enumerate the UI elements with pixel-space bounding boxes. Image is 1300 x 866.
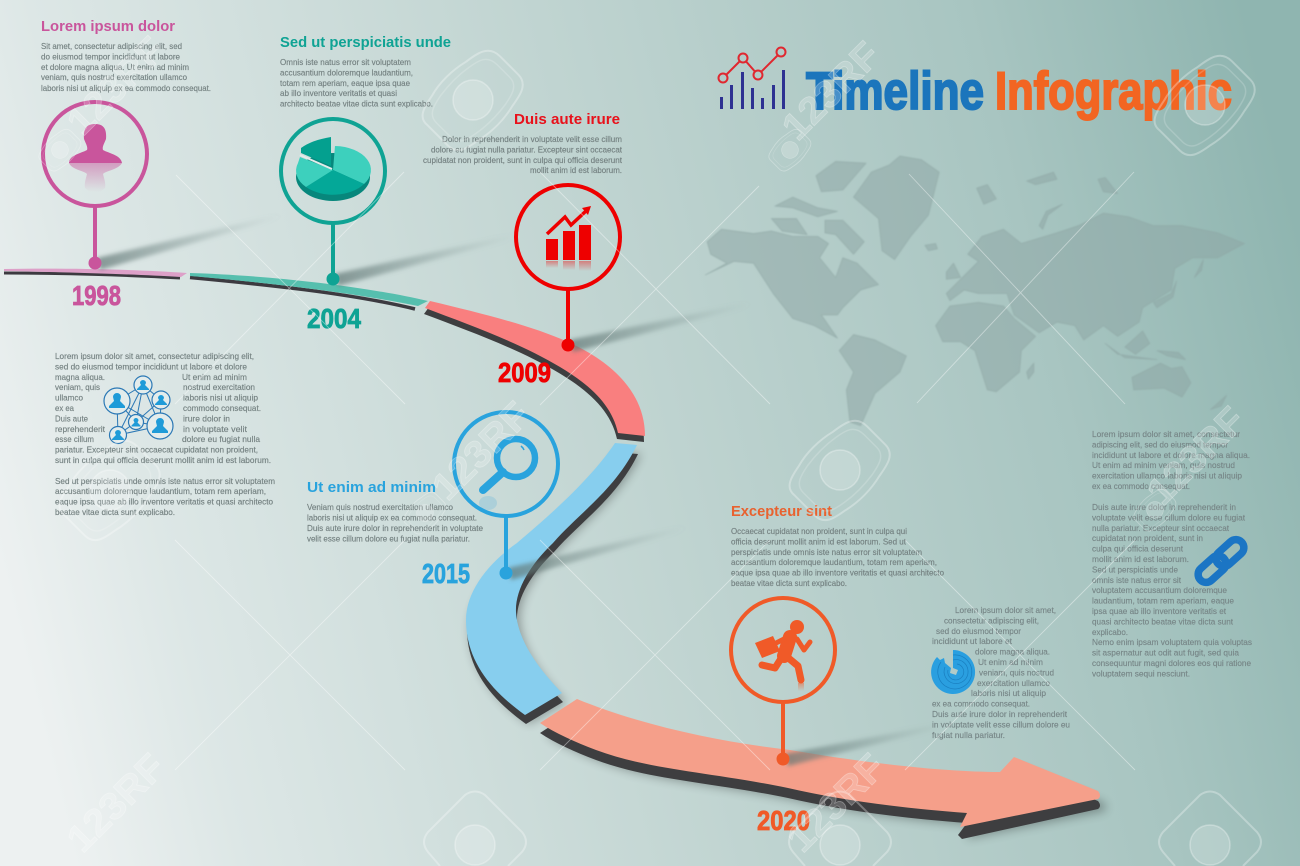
text block: right column with link icon: ex ea commodo consequat. (1092, 481, 1190, 491)
text block: wrapped around disc icon: exercitation ullamco (977, 678, 1050, 688)
icon: pie chart (296, 137, 371, 201)
title icon: line and bar chart (718, 48, 786, 109)
text block: Lorem ipsum dolor (41, 18, 211, 93)
text block: Excepteur sint: Excepteur sint (731, 503, 832, 520)
text block: Duis aute irure: Duis aute irure (514, 111, 620, 128)
watermark text: 123RF (779, 746, 894, 861)
text block: left column with network icon (55, 351, 275, 517)
text block: Ut enim ad minim (307, 479, 483, 544)
watermark text: 123RF (59, 746, 174, 861)
pin shadows (97, 214, 950, 766)
road: segment 2004 (190, 273, 428, 309)
text block: left column with network icon: esse cillum (55, 434, 94, 444)
text block: right column with link icon: Duis aute irure dolor in reprehenderit in (1092, 502, 1236, 512)
text block: right column with link icon: quasi architecto beatae vitae dicta sunt (1092, 616, 1234, 626)
text block: left column with network icon: accusantium doloremque laudantium, totam rem aperiam, (55, 486, 266, 496)
road: segment 1998 (4, 269, 187, 278)
milestone 1998 pin (43, 102, 147, 270)
text block: Lorem ipsum dolor: Sit amet, consectetur adipiscing elit, sed (41, 41, 182, 51)
year: 1998: 1998 (72, 280, 121, 311)
text block: right column with link icon: Nemo enim ipsam voluptatem quia voluptas (1092, 637, 1252, 647)
text block: left column with network icon: laboris nisi ut aliquip (183, 393, 258, 403)
text block: left column with network icon: in voluptate velit (183, 424, 248, 434)
text block: left column with network icon: Lorem ipsum dolor sit amet, consectetur adipiscing elit, (55, 351, 254, 361)
text block: wrapped around disc icon: fugiat nulla pariatur. (932, 730, 1005, 740)
text block: Ut enim ad minim: velit esse cillum dolore eu fugiat nulla pariatur. (307, 534, 470, 544)
text block: left column with network icon: Duis aute (55, 413, 88, 423)
icon: people network (104, 376, 173, 444)
text block: right column with link icon: ipsa quae ab illo inventore veritatis et (1092, 606, 1227, 616)
text block: Sed ut perspiciatis unde (280, 34, 451, 108)
text block: Excepteur sint: perspiciatis unde omnis iste natus error sit voluptatem (731, 547, 922, 557)
text block: wrapped around disc icon: dolore magna aliqua. (975, 647, 1050, 657)
text block: Excepteur sint (731, 503, 944, 588)
text block: right column with link icon: omnis iste natus error sit (1092, 575, 1182, 585)
watermark text: 123RF (1139, 399, 1254, 514)
text block: wrapped around disc icon: veniam, quis nostrud (979, 667, 1054, 677)
text block: right column with link icon: voluptate velit esse cillum dolore eu fugiat (1092, 512, 1246, 522)
text block: Lorem ipsum dolor: do eiusmod tempor incididunt ut labore (41, 52, 180, 62)
text block: right column with link icon: voluptatem accusantium doloremque (1092, 585, 1227, 595)
text block: Duis aute irure: dolore eu fugiat nulla pariatur. Excepteur sint occaecat (431, 144, 623, 154)
text block: Duis aute irure: mollit anim id est laborum. (530, 165, 622, 175)
text block: right column with link icon (1092, 429, 1252, 678)
icon: person (69, 124, 122, 192)
text block: right column with link icon: explicabo. (1092, 627, 1128, 637)
watermark text: 123RF (59, 29, 174, 144)
watermark text: 123RF (774, 34, 889, 149)
text block: right column with link icon: voluptatem sequi nesciunt. (1092, 668, 1190, 678)
text block: Lorem ipsum dolor: et dolore magna aliqua. Ut enim ad minim (41, 62, 189, 72)
title (806, 62, 1232, 121)
text block: right column with link icon: consequuntur magni dolores eos qui ratione (1092, 658, 1251, 668)
text block: Sed ut perspiciatis unde: Omnis iste natus error sit voluptatem (280, 57, 411, 67)
text block: Duis aute irure: cupidatat non proident, sunt in culpa qui officia deserunt (423, 155, 623, 165)
text block: right column with link icon: laudantium, totam rem aperiam, eaque (1092, 596, 1234, 606)
watermark text: 123RF (424, 394, 539, 509)
text block: Sed ut perspiciatis unde: ab illo inventore veritatis et quasi (280, 88, 397, 98)
text block: right column with link icon: Sed ut perspiciatis unde (1092, 564, 1178, 574)
text block: right column with link icon: cupidatat non proident, sunt in (1092, 533, 1203, 543)
text block: left column with network icon: dolore eu fugiat nulla (182, 434, 260, 444)
text block: wrapped around disc icon: ex ea commodo consequat. (932, 699, 1030, 709)
X-shaped guide lines (175, 172, 1135, 770)
icon: concentric disc (931, 650, 975, 694)
text block: Lorem ipsum dolor: Lorem ipsum dolor (41, 18, 175, 35)
text block: wrapped around disc icon: laboris nisi ut aliquip (971, 688, 1046, 698)
text block: wrapped around disc icon: Duis aute irure dolor in reprehenderit (932, 709, 1068, 719)
text block: Sed ut perspiciatis unde: architecto beatae vitae dicta sunt explicabo. (280, 98, 433, 108)
icon: magnifier (479, 439, 535, 510)
text block: wrapped around disc icon: in voluptate velit esse cillum dolore eu (932, 719, 1070, 729)
text block: Ut enim ad minim: Veniam quis nostrud exercitation ullamco (307, 502, 453, 512)
text block: Ut enim ad minim: Ut enim ad minim (307, 479, 436, 496)
year: 2020: 2020 (757, 805, 810, 836)
text block: left column with network icon: nostrud exercitation (183, 382, 255, 392)
icon: chain link (1195, 536, 1247, 586)
text block: right column with link icon: culpa qui officia deserunt (1092, 544, 1184, 554)
text block: left column with network icon: Ut enim ad minim (182, 372, 247, 382)
year: 2015: 2015 (422, 558, 470, 589)
text block: wrapped around disc icon (932, 605, 1070, 740)
text block: Excepteur sint: Occaecat cupidatat non proident, sunt in culpa qui (731, 526, 907, 536)
text block: right column with link icon: nulla pariatur. Excepteur sint occaecat (1092, 523, 1230, 533)
text block: left column with network icon: eaque ipsa quae ab illo inventore veritatis et quasi architecto (55, 497, 273, 507)
text block: Lorem ipsum dolor: laboris nisi ut aliquip ex ea commodo consequat. (41, 83, 211, 93)
text block: right column with link icon: Lorem ipsum dolor sit amet, consectetur (1092, 429, 1240, 439)
text block: Sed ut perspiciatis unde: Sed ut perspiciatis unde (280, 34, 451, 51)
milestone 2020 pin (731, 598, 835, 766)
text block: right column with link icon: incididunt ut labore et dolore magna aliqua. (1092, 450, 1250, 460)
milestone 2004 pin (281, 119, 385, 286)
title: Timeline (806, 62, 984, 121)
text block: Duis aute irure (423, 111, 623, 175)
text block: left column with network icon: beatae vitae dicta sunt explicabo. (55, 507, 175, 517)
text block: Excepteur sint: accusantium doloremque laudantium, totam rem aperiam, (731, 557, 937, 567)
text block: Ut enim ad minim: laboris nisi ut aliquip ex ea commodo consequat. (307, 512, 477, 522)
text block: Excepteur sint: officia deserunt mollit anim id est laborum. Sed ut (731, 536, 907, 546)
text block: Sed ut perspiciatis unde: accusantium doloremque laudantium, (280, 68, 413, 78)
text block: right column with link icon: exercitation ullamco laboris nisi ut aliquip (1092, 471, 1242, 481)
text block: left column with network icon: reprehenderit (55, 424, 106, 434)
road: segment 2009 (424, 301, 645, 442)
text block: Ut enim ad minim: Duis aute irure dolor in reprehenderit in voluptate (307, 523, 483, 533)
text block: Excepteur sint: eaque ipsa quae ab illo inventore veritatis et quasi architecto (731, 568, 944, 578)
text block: Sed ut perspiciatis unde: totam rem aperiam, eaque ipsa quae (280, 78, 410, 88)
text block: wrapped around disc icon: Lorem ipsum dolor sit amet, (955, 605, 1056, 615)
text block: wrapped around disc icon: consectetur adipiscing elit, (944, 615, 1039, 625)
text block: right column with link icon: Ut enim ad minim veniam, quis nostrud (1092, 460, 1235, 470)
text block: Excepteur sint: beatae vitae dicta sunt explicabo. (731, 578, 847, 588)
text block: wrapped around disc icon: Ut enim ad minim (978, 657, 1043, 667)
year: 2009: 2009 (498, 357, 551, 388)
text block: left column with network icon: sed do eiusmod tempor incididunt ut labore et dolore (55, 361, 247, 371)
icon: running man with briefcase (755, 620, 810, 691)
text block: Lorem ipsum dolor: veniam, quis nostrud exercitation ullamco (41, 72, 187, 82)
text block: wrapped around disc icon: incididunt ut labore et (932, 636, 1013, 646)
text block: left column with network icon: ex ea (55, 403, 74, 413)
icon: rising bar chart (546, 206, 591, 271)
text block: left column with network icon: veniam, quis (55, 382, 100, 392)
title: Infographic (995, 62, 1232, 121)
road: arrow segment 2020 (540, 699, 1106, 839)
milestone 2015 pin (454, 412, 558, 580)
text block: right column with link icon: sit aspernatur aut odit aut fugit, sed quia (1092, 648, 1239, 658)
milestone 2009 pin (516, 185, 620, 352)
road: segment 2015 (466, 443, 641, 724)
year: 2004: 2004 (307, 303, 361, 334)
text block: Duis aute irure: Dolor in reprehenderit in voluptate velit esse cillum (442, 134, 622, 144)
text block: left column with network icon: commodo consequat. (183, 403, 261, 413)
text block: left column with network icon: Sed ut perspiciatis unde omnis iste natus error sit voluptatem (55, 476, 275, 486)
text block: left column with network icon: irure dolor in (183, 413, 230, 423)
text block: right column with link icon: mollit anim id est laborum. (1092, 554, 1189, 564)
text block: wrapped around disc icon: sed do eiusmod tempor (936, 626, 1021, 636)
text block: left column with network icon: pariatur. Excepteur sint occaecat cupidatat non proident, (55, 445, 258, 455)
text block: right column with link icon: adipiscing elit, sed do eiusmod tempor (1092, 439, 1228, 449)
text block: left column with network icon: sunt in culpa qui officia deserunt mollit anim id est laborum. (55, 455, 271, 465)
text block: left column with network icon: magna aliqua. (55, 372, 105, 382)
world map (705, 156, 1244, 426)
text block: left column with network icon: ullamco (55, 393, 83, 403)
